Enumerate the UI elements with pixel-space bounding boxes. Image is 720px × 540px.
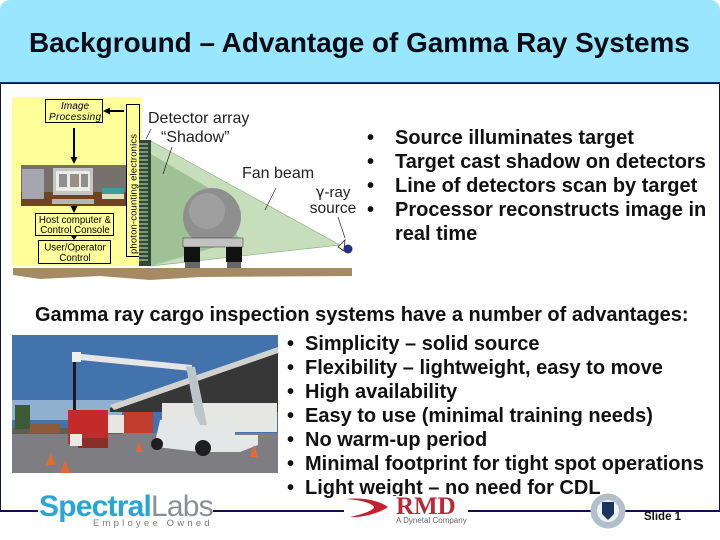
- photo: truck-mounted gamma ray scanner: [12, 335, 278, 473]
- advantages text: Easy to use (minimal training needs): [305, 405, 653, 427]
- box: host computer: Host computer &: [39, 215, 112, 226]
- bullets markers: •: [367, 175, 374, 197]
- gamma ray source icon: [338, 240, 352, 254]
- markers: •: [287, 357, 294, 379]
- title banner: [0, 0, 720, 83]
- panel: processing electronics: [12, 97, 142, 266]
- white trailer: [162, 403, 277, 432]
- logo: RMD: [344, 496, 468, 526]
- markers: [287, 333, 294, 499]
- markers: •: [287, 477, 294, 499]
- bullet text: real time: [395, 223, 477, 245]
- bullet text: Processor reconstructs image in: [395, 199, 706, 221]
- red containers: [108, 415, 124, 433]
- ground: [12, 433, 278, 473]
- warehouse: [110, 350, 278, 412]
- advantages text: No warm-up period: [305, 429, 487, 451]
- slide number: Slide 1: [644, 511, 681, 523]
- labels and leader lines: γ-ray: [316, 183, 351, 201]
- bullet text: Target cast shadow on detectors: [395, 151, 706, 173]
- logo: RMD: RMD: [396, 493, 456, 520]
- logo: Spectral Labs: Employee Owned: [93, 518, 213, 529]
- box: photon-counting electronics: photon-counting electronics: [128, 134, 140, 254]
- box: image processing: [46, 100, 102, 123]
- box: host computer: [36, 214, 114, 236]
- labels and leader lines: Detector array: [148, 110, 249, 127]
- cargo truck: [183, 188, 243, 268]
- box: user control: Control: [59, 253, 91, 264]
- advantages text: Light weight – no need for CDL: [305, 477, 601, 499]
- bullet text: Source illuminates target: [395, 127, 634, 149]
- slide frame: [0, 83, 720, 512]
- service truck: [156, 415, 258, 452]
- markers: •: [287, 429, 294, 451]
- labels and leader lines: Fan beam: [242, 165, 314, 182]
- markers: •: [287, 381, 294, 403]
- arrow: host to user: [70, 235, 78, 240]
- bullet list: advantages: [287, 333, 704, 499]
- box: image processing: Processing: [49, 112, 101, 123]
- bullets markers: [367, 127, 374, 221]
- bullets markers: •: [367, 151, 374, 173]
- boom: [72, 353, 192, 371]
- labels and leader lines: “Shadow”: [161, 129, 229, 146]
- fan beam: [151, 141, 340, 266]
- arrow: image processing to computer: [70, 128, 78, 164]
- arrow: electronics to image processing: [103, 108, 124, 114]
- bullets markers: •: [367, 199, 374, 221]
- markers: •: [287, 333, 294, 355]
- cones: [46, 442, 258, 473]
- arrow: computer to host: [70, 206, 78, 213]
- markers: •: [287, 405, 294, 427]
- computer workstation image: [21, 165, 126, 206]
- box: user control: User/Operator: [44, 242, 106, 254]
- box: image processing: Image: [61, 101, 89, 112]
- ground: [13, 268, 352, 280]
- advantages heading: Gamma ray cargo inspection systems have a number of advantages:: [35, 304, 689, 326]
- title: Background – Advantage of Gamma Ray Systems: [29, 27, 690, 58]
- bullet text: Line of detectors scan by target: [395, 175, 697, 197]
- diagram: gamma ray system schematic: [12, 97, 356, 280]
- advantages text: Flexibility – lightweight, easy to move: [305, 357, 663, 379]
- detector array: [139, 140, 151, 266]
- box: photon-counting electronics: [126, 104, 140, 256]
- box: host computer: Control Console: [40, 225, 110, 236]
- advantages text: Minimal footprint for tight spot operations: [305, 453, 704, 475]
- bullet list: how it works: [367, 127, 706, 245]
- bullet text: [395, 127, 706, 245]
- icon: DHS seal: [590, 494, 626, 528]
- box: user control: [38, 240, 110, 264]
- advantages text: High availability: [305, 381, 457, 403]
- advantages text: [305, 333, 704, 499]
- labels and leader lines: [146, 110, 356, 238]
- bullets markers: •: [367, 127, 374, 149]
- logo: Spectral Labs: SpectralLabs: [39, 490, 213, 523]
- labels and leader lines: source: [310, 200, 356, 217]
- logo: RMD: A Dynetal Company: [396, 516, 467, 525]
- advantages text: Simplicity – solid source: [305, 333, 540, 355]
- markers: •: [287, 453, 294, 475]
